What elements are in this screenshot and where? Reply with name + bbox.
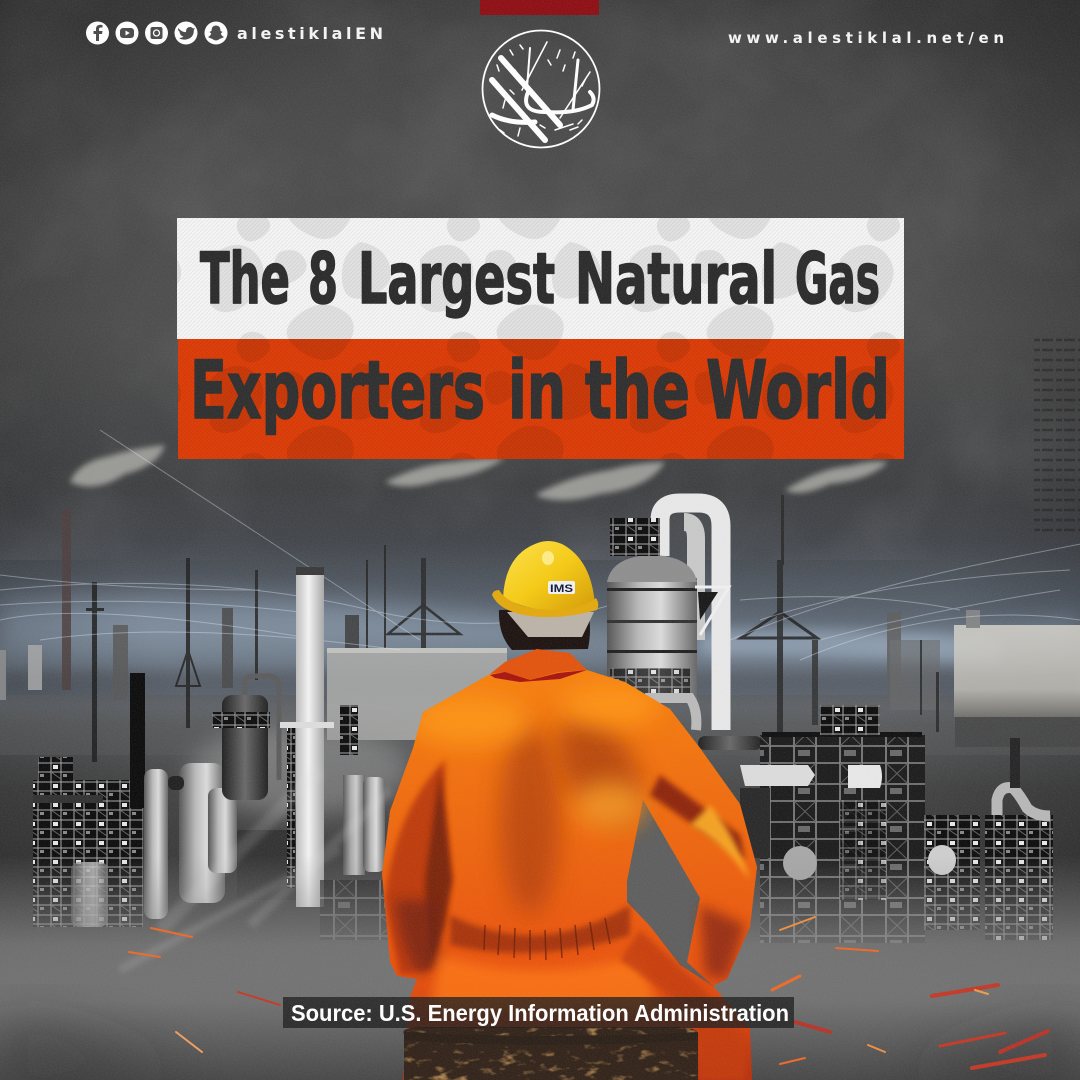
- lower mid structure: [237, 830, 299, 900]
- dark reactor tower: [212, 676, 279, 800]
- social media handle row: [86, 22, 383, 44]
- left process unit: [33, 757, 143, 927]
- right-of-stack vessels: [320, 705, 390, 940]
- worker in orange coverall: [382, 541, 757, 1080]
- horizontal elbow pipes: [645, 698, 696, 730]
- white title band: The: [200, 238, 290, 320]
- fog corner shading: [0, 1020, 1080, 1080]
- black column: [130, 673, 145, 808]
- large steel platform: [740, 705, 925, 943]
- orange title band: Exporters: [190, 344, 485, 437]
- calligraphic emblem logo: [482, 30, 600, 148]
- orange title band: in: [508, 344, 566, 437]
- icon: twitter: [174, 22, 198, 44]
- collar: [490, 649, 587, 680]
- smoke plumes: [70, 445, 888, 500]
- yellow hard hat: [492, 541, 598, 617]
- refinery: right section: [740, 705, 1053, 943]
- coverall silhouette and shading: [382, 649, 757, 1080]
- white title band: Natural: [575, 238, 777, 320]
- far right unit: [924, 738, 1053, 940]
- red top tab: [480, 0, 599, 15]
- white arched pipes: [684, 522, 696, 640]
- helmet liner straps: [507, 612, 594, 637]
- orange title band: the: [585, 344, 690, 437]
- haze behind the plant: [190, 725, 410, 815]
- refinery: left section: [33, 567, 390, 940]
- ground fog: [0, 855, 1080, 1080]
- title banner: [177, 218, 904, 459]
- helmet badge: IMS: [550, 583, 573, 595]
- white title band: [177, 218, 904, 339]
- social handle text: alestiklalEN: [237, 24, 383, 43]
- white stack: [280, 567, 334, 907]
- white title band: Gas: [795, 238, 880, 320]
- source caption: Source: U.S. Energy Information Administration: [291, 1000, 789, 1026]
- distillation column: [607, 518, 729, 703]
- white title band: Largest: [358, 238, 555, 320]
- orange title band: [178, 339, 904, 459]
- white title band: 8: [308, 238, 338, 320]
- icon: instagram: [145, 22, 168, 44]
- distant refinery skyline: [0, 495, 1080, 762]
- refinery: central distillation tower and pipes: [607, 503, 762, 881]
- sky streak lines: [0, 430, 1080, 660]
- website url: www.alestiklal.net/en: [728, 29, 1004, 47]
- icon: youtube: [116, 22, 138, 44]
- icon: snapchat: [204, 22, 228, 44]
- worker head and neck: [499, 608, 590, 650]
- sparks: [129, 917, 1048, 1068]
- light haze streaks: [120, 770, 390, 970]
- rusted barrel seat: [403, 1027, 699, 1080]
- icon: facebook: [86, 22, 109, 44]
- orange title band: World: [706, 344, 890, 437]
- newspaper clipping texture: [1034, 340, 1080, 530]
- tall vessels: [144, 763, 237, 919]
